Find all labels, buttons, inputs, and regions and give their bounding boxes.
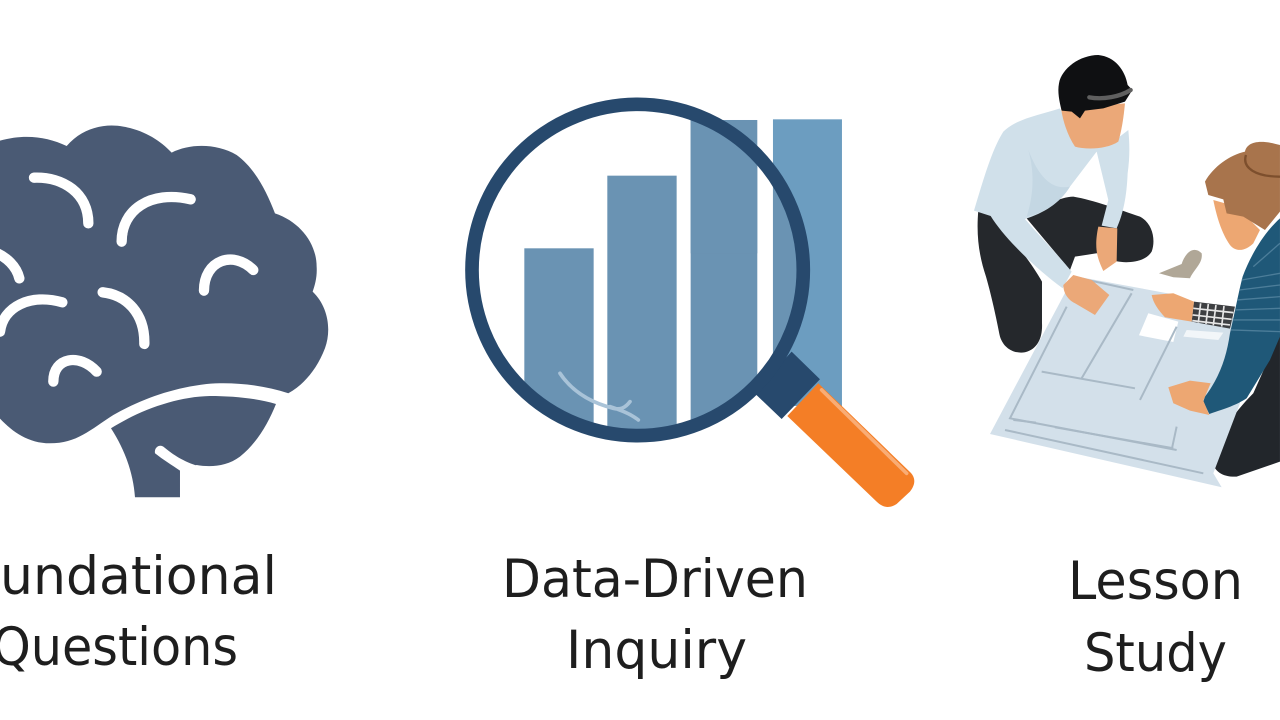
woman's head and hair <box>1205 142 1280 250</box>
label: Lesson Study: Study <box>1084 623 1227 684</box>
icon: brain <box>0 126 328 497</box>
man's shirt <box>974 108 1129 288</box>
label: Data-Driven Inquiry: Data-Driven <box>502 549 808 610</box>
label: Data-Driven Inquiry: Inquiry <box>566 620 747 681</box>
woman's plaid cuff <box>1192 302 1235 329</box>
woman's sweater <box>1203 218 1280 414</box>
magnifier ring <box>472 104 803 436</box>
magnifier handle <box>754 352 914 507</box>
illustration: two people studying a plan <box>974 55 1280 487</box>
woman's legs <box>1212 333 1280 477</box>
man's head <box>1058 55 1132 149</box>
label: Lesson Study: Lesson <box>1068 551 1243 612</box>
panel: lesson study <box>974 55 1280 684</box>
bar chart <box>524 119 842 436</box>
label: Data-Driven Inquiry <box>502 549 808 681</box>
label: Lesson Study <box>1068 551 1243 684</box>
floor plan sheet <box>990 276 1253 487</box>
panel: foundational questions <box>0 126 328 678</box>
man's pants <box>1027 197 1153 270</box>
rock on the floor <box>1159 250 1202 278</box>
panel: data-driven inquiry <box>472 104 914 681</box>
man's hands <box>1063 227 1117 315</box>
woman's hands <box>1152 293 1211 415</box>
label: Foundational Questions <box>0 546 277 678</box>
icon: magnifying glass over bar chart <box>472 104 914 507</box>
